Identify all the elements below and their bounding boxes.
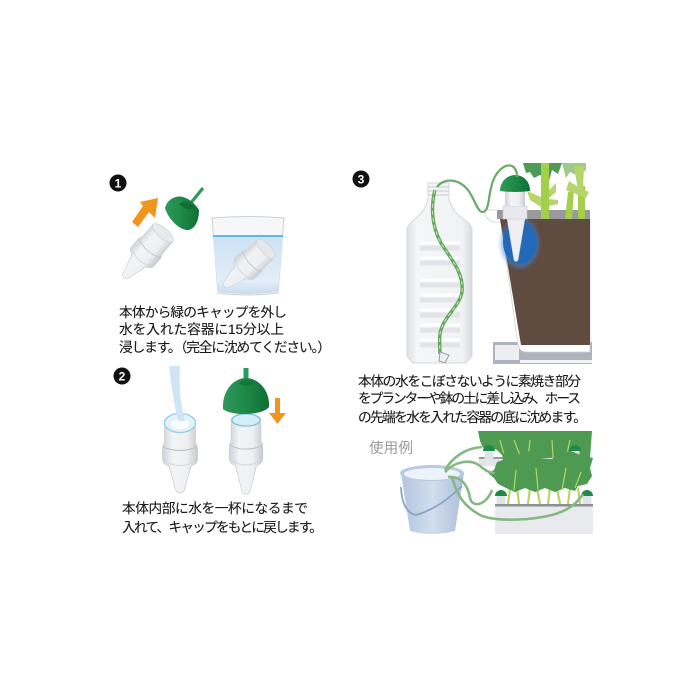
step 3 number badge — [352, 170, 370, 188]
step 2 text: 入れて、キャップをもとに戻します。 — [122, 520, 323, 535]
illustration: water poured into stake — [162, 366, 198, 493]
step 3 text — [358, 374, 587, 425]
step 2 number badge — [114, 368, 130, 384]
illustration: plastic bottle with hose — [407, 183, 472, 363]
illustration: stake inserted in soil with cap — [500, 175, 530, 262]
step 1 panel — [110, 174, 331, 355]
illustration: bucket with water — [400, 465, 464, 534]
step 3 text: をプランターや鉢の土に差し込み、ホース — [358, 391, 581, 406]
step 3 text: の先端を水を入れた容器の底に沈めます。 — [358, 409, 587, 425]
step 1 text: 浸します。（完全に沈めてください。） — [119, 340, 331, 355]
illustration: plant stems and leaves — [523, 163, 589, 219]
illustration: planter with soil — [485, 210, 592, 364]
icon: porous stake body — [113, 219, 178, 288]
step 3 number badge: 3 — [358, 172, 365, 186]
usage example label: 使用例 — [369, 440, 413, 457]
usage example panel — [369, 431, 593, 534]
hoses from bucket to stakes — [445, 447, 583, 520]
step 2 panel — [114, 366, 323, 535]
blue water seepage in soil — [501, 218, 539, 268]
hose from bottle to stake — [437, 165, 517, 212]
step 2 text: 本体内部に水を一杯になるまで — [122, 501, 308, 516]
illustration: stake with cap being replaced — [223, 368, 269, 494]
step 2 text — [122, 501, 323, 535]
step 3 text: 本体の水をこぼさないように素焼き部分 — [358, 374, 581, 389]
icon: orange arrow up-right — [132, 198, 158, 227]
icon: orange arrow down — [269, 398, 286, 424]
icon: green cap removed — [165, 188, 203, 230]
step 3 panel — [352, 163, 592, 425]
illustration: front planter with plants — [488, 451, 593, 534]
step 2 number badge: 2 — [119, 370, 126, 384]
illustration: glass of water with stake — [212, 216, 284, 297]
step 1 number badge: 1 — [115, 176, 122, 190]
step 1 number badge — [110, 174, 126, 192]
step 1 text: 本体から緑のキャップを外し — [119, 305, 287, 320]
step 1 text: 水を入れた容器に15分以上 — [119, 321, 284, 337]
step 1 text — [119, 305, 331, 355]
illustration: rear planter with plants — [478, 431, 592, 466]
